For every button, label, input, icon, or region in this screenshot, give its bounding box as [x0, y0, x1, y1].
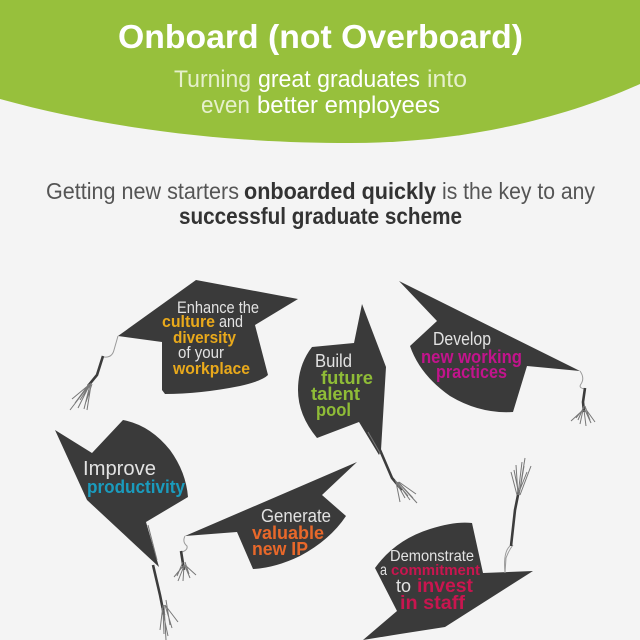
- intro statement: successful graduate scheme: [179, 203, 462, 229]
- subtitle: into: [427, 66, 467, 93]
- caption: Build: [315, 351, 352, 371]
- caption: invest: [417, 576, 474, 597]
- caption: Develop: [433, 329, 491, 349]
- tassel: [70, 336, 118, 410]
- caption: workplace: [172, 359, 250, 378]
- caption: productivity: [87, 477, 185, 497]
- hat: culture and diversity: [70, 280, 298, 410]
- caption: [421, 329, 522, 382]
- tassel: [505, 458, 531, 573]
- cap shape: [363, 523, 533, 640]
- caption: [252, 506, 331, 559]
- caption: a: [380, 562, 387, 579]
- hat: new working practices: [399, 281, 595, 426]
- intro statement: [46, 178, 595, 229]
- caption: Generate: [261, 506, 331, 526]
- tassel: [148, 525, 178, 640]
- caption: new working: [421, 347, 522, 367]
- caption: and: [219, 312, 243, 331]
- caption: Demonstrate: [390, 548, 474, 565]
- caption: pool: [316, 400, 351, 420]
- title: Onboard (not Overboard): [118, 18, 523, 55]
- intro statement: is the key to any: [442, 178, 595, 204]
- subtitle: better employees: [257, 92, 440, 119]
- caption: diversity: [173, 328, 236, 347]
- caption: talent: [311, 384, 360, 404]
- caption: [311, 351, 373, 420]
- caption: commitment: [391, 562, 480, 579]
- subtitle: Turning: [174, 66, 251, 93]
- intro statement: onboarded quickly: [244, 178, 436, 204]
- subtitle: great graduates: [258, 66, 420, 93]
- intro statement: Getting new starters: [46, 178, 239, 204]
- cap shape: [55, 420, 188, 567]
- caption: practices: [436, 362, 507, 382]
- caption: [380, 548, 480, 614]
- caption: Enhance the: [177, 298, 259, 317]
- caption: to: [396, 576, 411, 596]
- subtitle: even: [201, 92, 250, 119]
- tassel: [174, 536, 196, 581]
- caption: [83, 458, 185, 497]
- tassel: [368, 432, 417, 503]
- caption: of your: [178, 343, 224, 362]
- tassel: [571, 371, 595, 426]
- cap shape: [298, 304, 386, 455]
- caption: culture: [162, 312, 215, 331]
- hat: commitment to invest in staff: [363, 458, 533, 640]
- cap shape: [118, 280, 298, 394]
- caption: Improve: [83, 458, 156, 480]
- caption: in staff: [400, 593, 466, 614]
- caption: new IP: [252, 539, 308, 559]
- cap shape: [185, 462, 357, 569]
- hat: future talent pool: [298, 304, 417, 503]
- caption: future: [321, 368, 373, 388]
- subtitle: [174, 66, 467, 119]
- caption: [162, 298, 259, 378]
- hat: productivity: [55, 420, 188, 640]
- cap shape: [399, 281, 580, 412]
- green header banner: [0, 0, 640, 143]
- caption: valuable: [252, 523, 324, 543]
- hat: valuable new IP: [174, 462, 357, 581]
